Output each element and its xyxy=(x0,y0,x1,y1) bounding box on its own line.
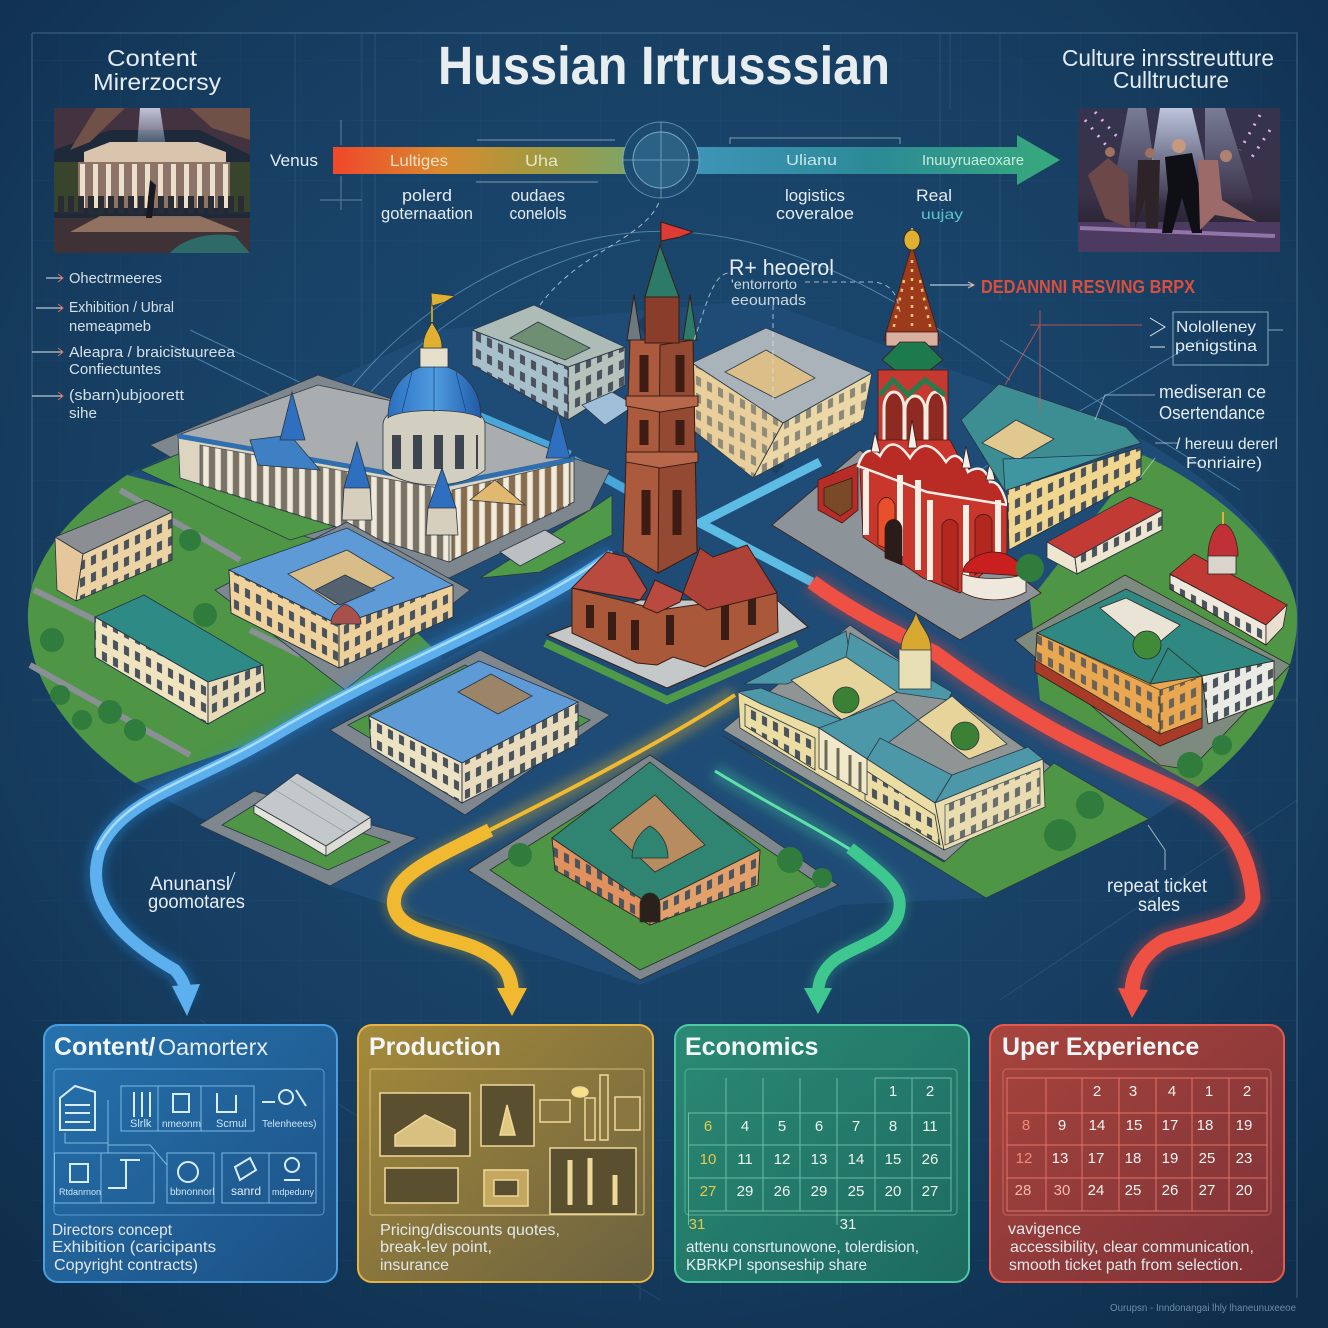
panel: production: insurance xyxy=(380,1257,449,1274)
timeline labels xyxy=(270,151,1024,223)
calendar: economics: 8 xyxy=(889,1118,897,1135)
timeline labels: Inuuyruaeoxare xyxy=(922,152,1024,169)
blue flow arrow xyxy=(96,552,612,1016)
callout: right notes: Fonriaire) xyxy=(1186,455,1262,472)
panel: left annotation list: Ohectrmeeres xyxy=(69,270,162,287)
panel: economics: KBRKPI sponseship share xyxy=(686,1257,867,1274)
calendar: user experience: 18 xyxy=(1197,1117,1213,1134)
callout: left map label xyxy=(148,872,245,913)
timeline labels: polerd xyxy=(402,186,452,205)
callout: centre building note: eeoumads xyxy=(731,292,806,309)
building: right yellow block xyxy=(961,384,1162,574)
calendar: user experience: 9 xyxy=(1058,1117,1066,1134)
callout: right notes: / hereuu dererl xyxy=(1176,436,1278,453)
calendar: user experience: 15 xyxy=(1126,1117,1142,1134)
panel: user experience: vavigence xyxy=(1008,1221,1081,1238)
calendar: user experience: 25 xyxy=(1125,1182,1141,1199)
panel: content: Oamorterx xyxy=(158,1034,268,1060)
callout: centre building note: R+ heoerol xyxy=(729,255,834,280)
panel: content: Telenheees) xyxy=(262,1119,316,1130)
callout: centre building note: 'entorrorto xyxy=(731,276,797,292)
panel: content: Copyright contracts) xyxy=(54,1257,198,1274)
calendar: user experience: 2 xyxy=(1093,1083,1101,1100)
building: white roof hall xyxy=(199,773,417,886)
trees: left park xyxy=(40,529,217,741)
panel: left annotation list: Exhibition / Ubral xyxy=(69,299,174,316)
calendar: user experience: 1 xyxy=(1205,1083,1213,1100)
timeline labels: logistics xyxy=(785,186,845,205)
panel: content: Rtdanrnon xyxy=(59,1187,101,1197)
calendar: economics: 31 xyxy=(689,1216,705,1233)
yellow flow arrow xyxy=(394,695,735,1016)
heading: culture right xyxy=(1062,45,1274,93)
panel: economics xyxy=(675,1025,969,1282)
calendar: economics: 6 xyxy=(704,1118,712,1135)
panel: user experience: smooth ticket path from selection. xyxy=(1009,1257,1243,1274)
callout: repeat ticket sales: sales xyxy=(1138,895,1180,916)
calendar: economics: 11 xyxy=(737,1151,753,1168)
heading: content left: Content xyxy=(107,45,198,71)
heading: content left xyxy=(93,45,222,95)
calendar: economics: 7 xyxy=(852,1118,860,1135)
red flow arrow xyxy=(812,582,1253,1018)
building: central brick tower xyxy=(545,222,808,700)
panel: user experience xyxy=(990,1025,1284,1282)
calendar: user experience: 4 xyxy=(1168,1083,1176,1100)
panel: content: Exhibition (caricipants xyxy=(52,1239,216,1256)
calendar: economics: 12 xyxy=(774,1151,790,1168)
panel: left annotation list: nemeapmeb xyxy=(69,318,151,335)
calendar: user experience: 25 xyxy=(1199,1150,1215,1167)
calendar: economics: 27 xyxy=(922,1183,938,1200)
panel: production: Production xyxy=(369,1033,501,1061)
base city platform xyxy=(28,300,1297,985)
panel: economics: Economics xyxy=(685,1033,818,1061)
panel: content: Slrlk xyxy=(130,1118,152,1130)
calendar: user experience: 30 xyxy=(1054,1182,1070,1199)
calendar: economics: 27 xyxy=(700,1183,716,1200)
building: teal and orange block xyxy=(1015,575,1290,770)
calendar: user experience: 17 xyxy=(1088,1150,1104,1167)
title: Hussian Irtrusssian xyxy=(438,36,890,96)
calendar: economics: 26 xyxy=(774,1183,790,1200)
callout: right notes: Osertendance xyxy=(1159,403,1265,423)
panel: content: Scmul xyxy=(216,1118,247,1130)
calendar: user experience: 14 xyxy=(1089,1117,1105,1134)
calendar: user experience: 26 xyxy=(1162,1182,1178,1199)
calendar: user experience: 13 xyxy=(1052,1150,1068,1167)
building: blue roof courtyard xyxy=(215,522,470,690)
icons: content diagram xyxy=(60,1086,306,1188)
calendar: user experience: 8 xyxy=(1022,1117,1030,1134)
curved blueprint lines xyxy=(170,231,1240,490)
calendar: user experience: 23 xyxy=(1236,1150,1252,1167)
calendar: user experience: 17 xyxy=(1162,1117,1178,1134)
panel: left annotation list xyxy=(32,270,236,422)
building: bottom brick courtyard xyxy=(468,755,838,980)
calendar: economics: 31 xyxy=(840,1216,856,1233)
calendar: user experience: 2 xyxy=(1243,1083,1251,1100)
calendar: economics: 2 xyxy=(926,1083,934,1100)
callout: centre building note xyxy=(540,200,900,400)
calendar: user experience: 24 xyxy=(1088,1182,1104,1199)
calendar: user experience: 18 xyxy=(1125,1150,1141,1167)
callout: right notes: mediseran ce xyxy=(1159,382,1266,402)
calendar: economics: 20 xyxy=(885,1183,901,1200)
panel: left annotation list: Confiectuntes xyxy=(69,361,161,378)
icons: production pictures xyxy=(380,1075,640,1214)
panel: content: sanrd xyxy=(231,1184,261,1198)
image: stage performers xyxy=(1078,108,1280,252)
panel: user experience: Uper Experience xyxy=(1002,1033,1199,1061)
timeline labels: Lultiges xyxy=(390,153,448,170)
calendar: economics: 29 xyxy=(811,1183,827,1200)
building: left cathedral complex xyxy=(140,293,612,578)
building: back cream block xyxy=(692,328,872,478)
building: blue courtyard lower xyxy=(330,650,610,815)
building: far left block xyxy=(55,500,172,601)
calendar: economics: 13 xyxy=(811,1151,827,1168)
panel: left annotation list: sihe xyxy=(69,405,97,422)
panel: left annotation list: Aleapra / braicistuureea xyxy=(69,344,236,361)
panel: content: Directors concept xyxy=(52,1222,173,1239)
callout: repeat ticket sales: repeat ticket xyxy=(1107,876,1208,897)
timeline labels: Real xyxy=(916,186,952,205)
calendar: user experience: 28 xyxy=(1015,1182,1031,1199)
panel: production: break-lev point, xyxy=(380,1239,492,1256)
panel: production xyxy=(358,1025,653,1282)
calendar: economics: 10 xyxy=(700,1151,716,1168)
callout: red heading: DEDANNNI RESVING BRPX xyxy=(981,277,1195,297)
calendar: economics: 6 xyxy=(815,1118,823,1135)
callout: right notes: penigstina xyxy=(1175,338,1257,355)
timeline labels: Uha xyxy=(525,153,558,170)
green flow arrow xyxy=(715,771,900,1014)
calendar: user experience: 27 xyxy=(1199,1182,1215,1199)
calendar: economics: 1 xyxy=(889,1083,897,1100)
building: red cathedral xyxy=(772,228,1044,640)
timeline arrow xyxy=(320,120,1060,210)
timeline labels: conelols xyxy=(510,204,566,223)
panel: content xyxy=(44,1025,337,1282)
calendar: economics xyxy=(688,1078,951,1233)
building: large cream and teal block xyxy=(723,612,1149,898)
callout: left map label: goomotares xyxy=(148,892,245,913)
image: theatre facade xyxy=(54,108,250,253)
callout: repeat ticket sales xyxy=(1107,825,1208,916)
callout: left map label: Anunansl xyxy=(150,874,230,895)
calendar: user experience: 20 xyxy=(1236,1182,1252,1199)
timeline labels: goternaation xyxy=(381,204,473,223)
calendar: economics: 4 xyxy=(741,1118,749,1135)
building: back gray block xyxy=(472,305,635,425)
timeline labels: Venus xyxy=(270,151,318,170)
building: red roof small dome xyxy=(1170,512,1287,645)
callout: right notes xyxy=(1005,310,1283,478)
panel: user experience: accessibility, clear communication, xyxy=(1010,1239,1254,1256)
calendar: user experience: 3 xyxy=(1129,1083,1137,1100)
trees: lower clusters xyxy=(508,735,1232,888)
calendar: user experience: 19 xyxy=(1236,1117,1252,1134)
calendar: user experience: 12 xyxy=(1016,1150,1032,1167)
heading: content left: Mirerzocrsy xyxy=(93,69,222,95)
heading: culture right: Culture inrsstreutture xyxy=(1062,45,1274,71)
cyan flow segment xyxy=(700,462,820,582)
calendar: economics: 26 xyxy=(922,1151,938,1168)
calendar: economics: 14 xyxy=(848,1151,864,1168)
building: teal roof block xyxy=(95,595,265,724)
calendar: economics: 29 xyxy=(737,1183,753,1200)
heading: culture right: Culltructure xyxy=(1113,67,1229,93)
panel: content: mdpeduny xyxy=(272,1187,315,1197)
timeline labels: coveraloe xyxy=(776,204,854,223)
panel: content: Content/ xyxy=(54,1033,155,1061)
panel: content: bbnonnorl xyxy=(170,1187,214,1198)
footer note: Ourupsn - Inndonangai lhly lhaneunuxeeoe xyxy=(1110,1303,1296,1314)
panel: economics: attenu consrtunowone, tolerdision, xyxy=(686,1239,919,1256)
timeline labels: uujay xyxy=(921,206,963,222)
calendar: user experience xyxy=(1007,1078,1267,1211)
panel: production: Pricing/discounts quotes, xyxy=(380,1222,560,1239)
calendar: economics: 25 xyxy=(848,1183,864,1200)
calendar: economics: 15 xyxy=(885,1151,901,1168)
timeline labels: oudaes xyxy=(511,186,565,205)
panel: left annotation list: (sbarn)ubjoorett xyxy=(69,387,185,404)
callout: right notes: Nololleney xyxy=(1176,319,1256,336)
panel: content: nmeonm xyxy=(162,1119,201,1130)
calendar: economics: 11 xyxy=(922,1118,938,1135)
timeline labels: Ulianu xyxy=(786,152,837,169)
calendar: user experience: 19 xyxy=(1162,1150,1178,1167)
calendar: economics: 5 xyxy=(778,1118,786,1135)
